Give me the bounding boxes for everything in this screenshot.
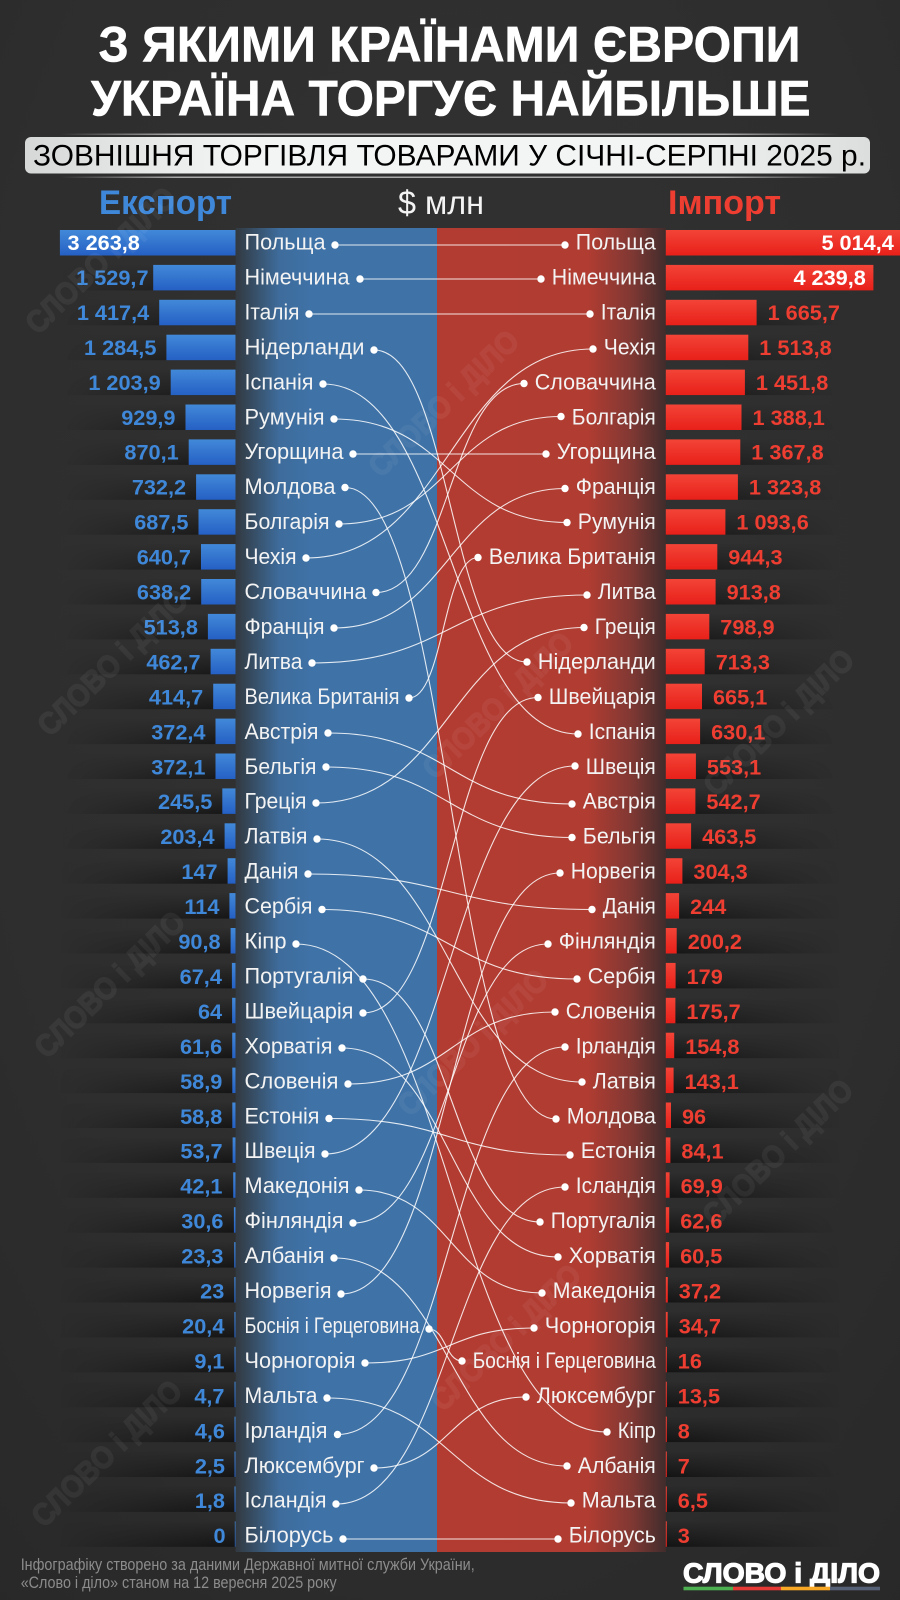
export: Польща (60, 230, 326, 256)
import: Нідерланди: 713,3 (716, 649, 770, 674)
import: Австрія: Австрія (583, 789, 656, 814)
export: Греція: 245,5 (158, 789, 212, 814)
import: Литва (598, 579, 781, 604)
export: Ірландія (195, 1417, 328, 1443)
import: Фінляндія: 200,2 (688, 929, 742, 954)
import: Чорногорія: Чорногорія (545, 1313, 656, 1338)
export: Хорватія: Хорватія (244, 1033, 332, 1058)
import: Норвегія (571, 858, 748, 884)
export: Хорватія: 61,6 (180, 1034, 222, 1059)
connector: Німеччина (356, 275, 545, 283)
export: Латвія: 203,4 (160, 824, 215, 849)
export: Сербія (184, 893, 312, 919)
export: Норвегія (200, 1277, 332, 1304)
export: Болгарія: 687,5 (134, 510, 188, 535)
import: Угорщина: 1 367,8 (751, 440, 824, 465)
import: Австрія (583, 788, 761, 814)
import: Хорватія: Хорватія (569, 1243, 656, 1268)
export: Кіпр (178, 928, 286, 954)
export: Швеція: Швеція (244, 1138, 316, 1163)
export: Хорватія (180, 1033, 332, 1059)
connector: Велика Британія (405, 554, 482, 702)
connector: Данія (304, 870, 596, 913)
import: Болгарія: Болгарія (572, 404, 656, 429)
export: Естонія: 58,8 (180, 1104, 222, 1129)
import: Чорногорія (545, 1312, 721, 1338)
export: Люксембург: 2,5 (195, 1453, 225, 1478)
export: Естонія: Естонія (244, 1103, 320, 1128)
import: Швейцарія: Швейцарія (549, 684, 656, 709)
export: Швейцарія: Швейцарія (244, 998, 354, 1023)
export: Словенія: 58,9 (180, 1069, 222, 1094)
export: Сербія: Сербія (244, 894, 312, 919)
export: Білорусь: 0 (213, 1523, 226, 1548)
import: Македонія: 37,2 (679, 1278, 721, 1304)
export: Норвегія: Норвегія (244, 1278, 332, 1303)
export: Данія: 147 (181, 859, 218, 884)
export: Естонія (180, 1102, 320, 1129)
import: Сербія (588, 963, 723, 989)
import: Люксембург: 13,5 (678, 1383, 720, 1408)
export: Фінляндія (181, 1207, 344, 1234)
export: Ірландія: Ірландія (244, 1418, 328, 1443)
export: Македонія (180, 1172, 350, 1199)
connector: Чехія (302, 345, 597, 562)
export: Литва (146, 649, 303, 674)
import: Норвегія: Норвегія (571, 859, 656, 884)
connector: Нідерланди (370, 346, 531, 666)
panel: export bar chart (60, 230, 420, 1548)
import: Іспанія: 630,1 (711, 719, 765, 744)
export: Молдова: Молдова (244, 474, 336, 499)
import: Португалія: Португалія (551, 1208, 656, 1233)
export: Велика Британія: 414,7 (149, 684, 203, 709)
connector: Ірландія (334, 1043, 569, 1438)
export: Білорусь: Білорусь (244, 1523, 334, 1548)
import: Ірландія: 154,8 (685, 1034, 739, 1059)
connector: Боснія і Герцеговина (425, 1325, 466, 1365)
export: Чорногорія: 9,1 (194, 1348, 224, 1373)
import: Мальта: Мальта (582, 1488, 656, 1513)
export: Швейцарія: 64 (198, 999, 222, 1024)
import: Ісландія: 69,9 (681, 1174, 723, 1199)
export: Італія: Італія (244, 299, 300, 324)
heading: import: Імпорт (668, 184, 781, 222)
export: Словенія (180, 1068, 338, 1094)
export: Румунія: Румунія (244, 404, 324, 429)
import: Молдова: Молдова (567, 1103, 656, 1128)
import: Італія (601, 299, 840, 325)
connector: Румунія (330, 415, 571, 526)
import: Люксембург: Люксембург (537, 1383, 656, 1408)
text: СЛОВО і ДІЛО (423, 1257, 588, 1418)
import: Бельгія (583, 823, 756, 849)
import: Мальта (582, 1486, 708, 1513)
import: Сербія: 179 (687, 964, 723, 989)
export: Литва: 462,7 (146, 649, 201, 674)
export: Чехія: Чехія (244, 544, 296, 569)
export: Португалія: Португалія (244, 964, 354, 988)
connector: Австрія (324, 729, 576, 808)
import: Німеччина (552, 264, 873, 290)
export: Албанія: Албанія (244, 1243, 324, 1268)
connector: Чорногорія (361, 1324, 538, 1367)
import: Македонія (553, 1277, 721, 1304)
text: СЛОВО і ДІЛО (415, 625, 580, 786)
title: УКРАЇНА ТОРГУЄ НАЙБІЛЬШЕ (91, 69, 810, 126)
connector: Білорусь (339, 1535, 562, 1543)
import: Естонія: Естонія (581, 1138, 656, 1163)
import: Білорусь: Білорусь (569, 1523, 656, 1548)
export: Іспанія: 1 203,9 (88, 370, 161, 395)
import: Німеччина: Німеччина (552, 264, 656, 290)
import: Словенія: Словенія (566, 998, 656, 1023)
text: СЛОВО і ДІЛО (390, 962, 555, 1123)
connector: Фінляндія (349, 940, 552, 1227)
import: Нідерланди: Нідерланди (538, 649, 656, 674)
import: Польща (576, 230, 900, 256)
export: Мальта: Мальта (244, 1383, 318, 1408)
export: Іспанія (88, 369, 314, 395)
export: Норвегія: 23 (200, 1278, 224, 1304)
import: Кіпр: 8 (678, 1418, 690, 1443)
import: Мальта: 6,5 (678, 1488, 708, 1513)
export: Німеччина: Німеччина (244, 264, 350, 290)
export: Бельгія (151, 754, 316, 779)
heading: unit: $ млн (398, 184, 484, 221)
import: Іспанія: Іспанія (589, 719, 656, 744)
import: Франція: Франція (576, 474, 656, 499)
export: Чехія: 640,7 (137, 545, 191, 570)
connector: Молдова (341, 484, 560, 1123)
connector: Ісландія (332, 1183, 569, 1508)
import: Греція: Греція (595, 614, 656, 639)
export: Велика Британія (149, 684, 400, 709)
import: Словаччина: 1 451,8 (756, 370, 828, 395)
panel: import bar chart (473, 230, 900, 1548)
import: Франція (576, 474, 821, 500)
text: СЛОВО і ДІЛО (361, 323, 526, 484)
connector: Македонія (355, 1186, 546, 1297)
export: Італія: 1 417,4 (77, 300, 149, 325)
import: Словаччина: Словаччина (535, 369, 656, 394)
import: Румунія: 1 093,6 (736, 510, 809, 535)
import: Польща: 5 014,4 (821, 230, 894, 255)
import: Латвія: 143,1 (685, 1069, 739, 1094)
import: Люксембург (537, 1382, 720, 1408)
export: Польща: Польща (244, 230, 326, 254)
import: Кіпр (618, 1417, 690, 1443)
export: Швеція: 53,7 (180, 1139, 223, 1164)
export: Іспанія: Іспанія (244, 369, 314, 394)
text: СЛОВО і ДІЛО (30, 582, 195, 743)
import: Італія: 1 665,7 (768, 300, 840, 325)
export: Ісландія (195, 1486, 326, 1513)
import: Словенія: 175,7 (686, 999, 741, 1024)
import: Боснія і Герцеговина: 16 (678, 1348, 702, 1373)
export: Македонія: 42,1 (180, 1174, 222, 1199)
export: Швейцарія (198, 998, 354, 1024)
export: Мальта (194, 1382, 318, 1408)
connector: Латвія (313, 835, 586, 1086)
export: Люксембург (195, 1452, 364, 1478)
export: Ісландія: 1,8 (195, 1488, 225, 1513)
import: Албанія (578, 1452, 690, 1478)
export: Молдова (132, 474, 336, 500)
export: Швеція (180, 1137, 316, 1164)
import: Норвегія: 304,3 (693, 859, 748, 884)
import: Швеція: 553,1 (707, 754, 761, 779)
export: Словенія: Словенія (244, 1068, 338, 1093)
import: Угорщина: Угорщина (557, 439, 656, 464)
import: Угорщина (557, 439, 824, 465)
import: Сербія: Сербія (588, 964, 656, 988)
import: Чехія: 1 513,8 (759, 335, 832, 360)
export: Румунія: 929,9 (121, 405, 176, 430)
export: Бельгія: 372,1 (151, 754, 206, 779)
import: Італія: Італія (601, 299, 656, 324)
import: Фінляндія (559, 928, 742, 954)
import: Естонія (581, 1137, 724, 1164)
connector: Словенія (344, 1008, 559, 1088)
export: Данія (181, 858, 298, 884)
import: Чорногорія: 34,7 (679, 1314, 721, 1338)
export: Ірландія: 4,6 (195, 1418, 225, 1443)
import: Кіпр: Кіпр (618, 1418, 656, 1443)
title (91, 16, 810, 126)
export: Словаччина (137, 579, 367, 604)
footer source note (21, 1556, 475, 1592)
import: Литва: 913,8 (727, 580, 781, 604)
import: Хорватія: 60,5 (680, 1244, 722, 1269)
export: Чорногорія: Чорногорія (244, 1348, 356, 1373)
export: Литва: Литва (244, 649, 303, 674)
import: Швейцарія (549, 684, 767, 709)
export: Румунія (121, 404, 324, 430)
import: Словенія (566, 998, 741, 1024)
panel: centre blue and red background (236, 228, 666, 1552)
export: Боснія і Герцеговина: 20,4 (182, 1314, 224, 1338)
import: Ісландія: Ісландія (576, 1173, 656, 1198)
export: Нідерланди: Нідерланди (244, 334, 364, 359)
import: Албанія: 7 (678, 1453, 690, 1478)
import: Іспанія (589, 719, 765, 744)
import: Ісландія (576, 1172, 723, 1199)
import: Румунія (578, 509, 809, 535)
import: Велика Британія (489, 544, 783, 570)
connector: Сербія (318, 906, 581, 983)
import: Чехія (604, 334, 832, 360)
export: Нідерланди (84, 334, 364, 360)
import: Греція: 798,9 (720, 614, 775, 640)
export: Німеччина: 1 529,7 (76, 265, 148, 290)
import: Польща: Польща (576, 230, 656, 254)
export: Чехія (137, 544, 296, 570)
export: Угорщина: 870,1 (124, 440, 179, 465)
import: Швеція (586, 754, 761, 779)
logo: Слово і діло: СЛОВО і ДІЛО (683, 1558, 880, 1589)
connector: Бельгія (322, 763, 576, 841)
connector: Естонія (325, 1115, 574, 1159)
heading: export: Експорт (99, 184, 232, 222)
connector: Норвегія (337, 869, 564, 1298)
connector: Польща (331, 241, 569, 249)
export: Польща: 3 263,8 (68, 230, 140, 255)
connector: Греція (312, 624, 588, 807)
export: Латвія (160, 823, 308, 849)
import: Білорусь: 3 (678, 1523, 690, 1548)
export: Австрія: 372,4 (151, 719, 206, 744)
export: Данія: Данія (244, 859, 298, 884)
import: Данія: 244 (690, 894, 726, 919)
import: Велика Британія: 944,3 (728, 545, 783, 570)
connector: Люксембург (370, 1393, 530, 1472)
export: Мальта: 4,7 (194, 1383, 224, 1408)
import: Греція (595, 614, 775, 640)
export: Латвія: Латвія (244, 824, 308, 849)
import: Болгарія (572, 404, 825, 430)
import: Швеція: Швеція (586, 754, 656, 779)
connector: Словаччина (372, 380, 528, 596)
export: Греція: Греція (244, 789, 306, 814)
footer source note: Інфографіку створено за даними Державної митної служби України, (21, 1556, 475, 1574)
export: Португалія (180, 963, 354, 989)
export: Словаччина: Словаччина (244, 579, 367, 604)
export: Франція: Франція (244, 614, 324, 639)
export: Греція (158, 788, 306, 814)
export: Угорщина: Угорщина (244, 439, 344, 464)
import: Латвія (593, 1068, 739, 1094)
connector: Хорватія (338, 1044, 562, 1261)
export: Кіпр: 90,8 (178, 929, 221, 954)
import: Хорватія (569, 1242, 722, 1269)
import: Естонія: 84,1 (681, 1139, 724, 1164)
connector: Іспанія (319, 380, 582, 738)
export: Фінляндія: 30,6 (181, 1209, 224, 1234)
import: Швейцарія: 665,1 (713, 684, 767, 709)
text: СЛОВО і ДІЛО (24, 1373, 189, 1534)
export: Люксембург: Люксембург (244, 1453, 364, 1478)
footer source note: «Слово і діло» станом на 12 вересня 2025 року (21, 1574, 337, 1592)
import: Португалія: 62,6 (680, 1209, 722, 1234)
export: Ісландія: Ісландія (244, 1488, 326, 1513)
import: Латвія: Латвія (593, 1068, 656, 1093)
export: Чорногорія (194, 1347, 356, 1373)
export: Австрія: Австрія (244, 719, 318, 744)
export: Словаччина: 638,2 (137, 580, 191, 604)
export: Молдова: 732,2 (132, 475, 186, 500)
export: Македонія: Македонія (244, 1173, 350, 1198)
export: Італія (77, 299, 300, 325)
export: Франція: 513,8 (144, 614, 198, 640)
import: Велика Британія: Велика Британія (489, 544, 656, 569)
connector: Швейцарія (359, 694, 542, 1017)
export: Білорусь (213, 1521, 334, 1548)
import: Бельгія: Бельгія (583, 824, 656, 849)
import: Австрія: 542,7 (706, 789, 761, 814)
export: Франція (144, 614, 324, 640)
export: Боснія і Герцеговина (182, 1312, 420, 1338)
export: Австрія (151, 719, 318, 744)
connector: Кіпр (292, 940, 611, 1436)
subtitle banner: ЗОВНІШНЯ ТОРГІВЛЯ ТОВАРАМИ У СІЧНІ-СЕРПНІ 2025 р. (33, 140, 866, 173)
connector: Італія (305, 310, 594, 318)
connector: Литва (308, 591, 591, 667)
import: Словаччина (535, 369, 828, 395)
import: Албанія: Албанія (578, 1453, 656, 1478)
title: З ЯКИМИ КРАЇНАМИ ЄВРОПИ (98, 16, 800, 73)
export: Фінляндія: Фінляндія (244, 1208, 344, 1233)
import: Бельгія: 463,5 (702, 824, 756, 849)
import: Болгарія: 1 388,1 (753, 405, 825, 430)
import: Македонія: Македонія (553, 1278, 656, 1303)
import: Португалія (551, 1207, 722, 1234)
import: Молдова: 96 (682, 1104, 706, 1129)
connector: Болгарія (335, 413, 565, 528)
import: Ірландія: Ірландія (576, 1033, 656, 1058)
import: Данія: Данія (603, 894, 656, 919)
import: Ірландія (576, 1033, 739, 1059)
export: Німеччина (76, 264, 350, 290)
connector: Мальта (323, 1394, 575, 1507)
import: Румунія: Румунія (578, 509, 656, 534)
connector: Швеція (321, 762, 579, 1158)
import: Білорусь (569, 1521, 690, 1548)
text: СЛОВО і ДІЛО (696, 642, 861, 803)
import: Данія (603, 893, 726, 919)
export: Боснія і Герцеговина: Боснія і Герцеговина (244, 1313, 420, 1338)
export: Албанія: 23,3 (181, 1244, 224, 1269)
connector: Албанія (330, 1254, 571, 1470)
import: Молдова (567, 1102, 706, 1129)
export: Албанія (181, 1242, 324, 1269)
connectors between export and import ranks (292, 241, 611, 1543)
connector: Португалія (359, 975, 544, 1226)
import: Чехія: Чехія (604, 334, 656, 359)
export: Сербія: 114 (184, 894, 219, 919)
export: Угорщина (124, 439, 344, 465)
export: Велика Британія: Велика Британія (244, 684, 400, 709)
connector: Угорщина (349, 450, 550, 458)
text: СЛОВО і ДІЛО (18, 180, 183, 341)
import: Фінляндія: Фінляндія (559, 928, 656, 954)
export: Нідерланди: 1 284,5 (84, 335, 156, 360)
import: Боснія і Герцеговина: Боснія і Герцеговина (473, 1348, 656, 1373)
import: Нідерланди (538, 649, 770, 674)
export: Болгарія (134, 509, 330, 535)
export: Кіпр: Кіпр (244, 928, 286, 954)
export: Болгарія: Болгарія (244, 509, 330, 534)
connector: Франція (330, 485, 569, 632)
export: Португалія: 67,4 (180, 964, 222, 989)
text: СЛОВО і ДІЛО (27, 904, 192, 1065)
import: Німеччина: 4 239,8 (793, 265, 866, 290)
import: Литва: Литва (598, 579, 656, 604)
import: Франція: 1 323,8 (749, 475, 821, 500)
export: Бельгія: Бельгія (244, 754, 316, 779)
text: СЛОВО і ДІЛО (695, 1072, 860, 1233)
